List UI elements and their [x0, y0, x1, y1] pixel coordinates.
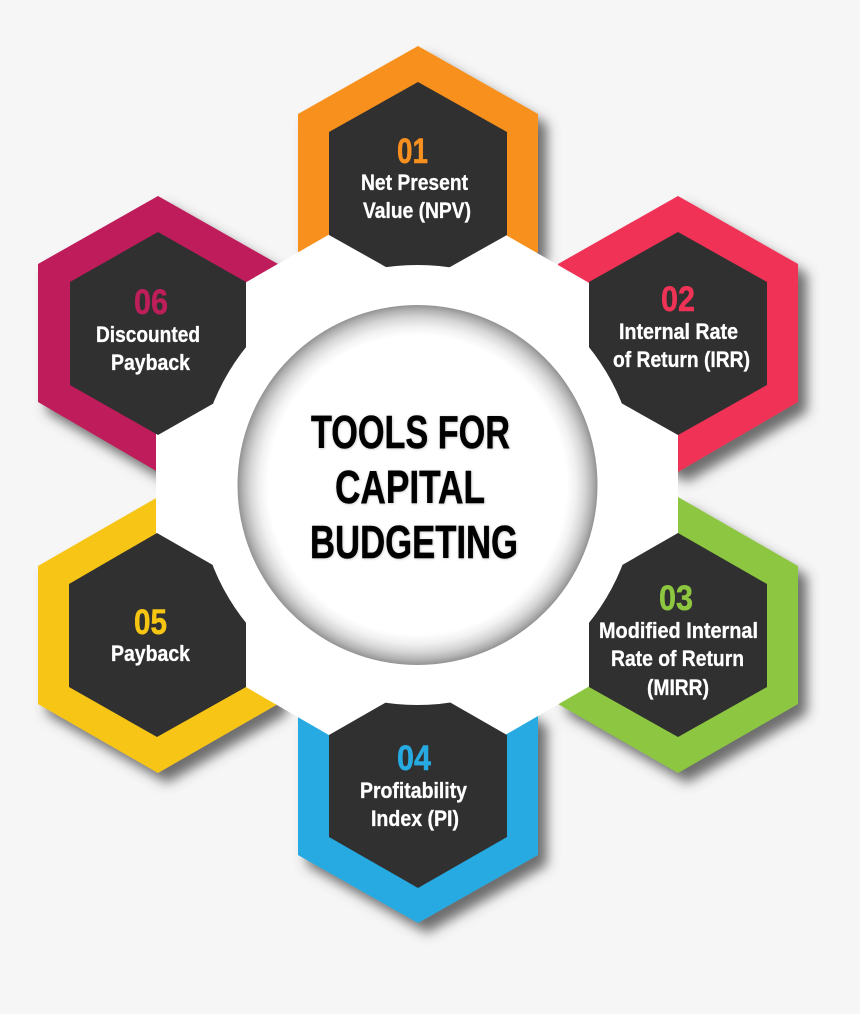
label 02: Internal Rate of Return (IRR): [613, 280, 750, 372]
hexagon ring 04 blue: [298, 647, 538, 923]
label 06: Discounted Payback: [96, 283, 200, 375]
title: BUDGETING: [310, 516, 518, 568]
dark face 06: [70, 232, 246, 435]
label 03: Modified Internal Rate of Return (MIRR): [599, 579, 758, 700]
label 04: Profitability Index (PI): 04: [397, 739, 431, 778]
white gear hexagon: [156, 184, 678, 786]
hexagon ring 02 pink: [558, 196, 798, 472]
hexagon ring 01 orange: [298, 46, 538, 322]
label 01: Net Present Value (NPV): 01: [397, 132, 428, 171]
dark face 02: [589, 232, 767, 435]
label 06: Discounted Payback: Payback: [111, 350, 191, 375]
dark face 05: [69, 533, 246, 737]
hexagon ring 05 yellow: [38, 497, 278, 773]
panel: dark hexagon faces: [69, 82, 767, 888]
label 01: Net Present Value (NPV): Net Present: [361, 170, 469, 195]
label 06: Discounted Payback: 06: [134, 283, 168, 322]
white gear hub: [198, 265, 638, 705]
title: CAPITAL: [335, 461, 485, 513]
label 05: Payback: Payback: [111, 641, 191, 666]
centre dish with inner shadow: [238, 305, 598, 665]
label 02: Internal Rate of Return (IRR): Internal Rate: [619, 319, 738, 344]
label 03: Modified Internal Rate of Return (MIRR): (MIRR): [647, 675, 709, 700]
hexagon ring 03 green: [558, 497, 798, 773]
dark face 04: [329, 684, 507, 888]
label 03: Modified Internal Rate of Return (MIRR): Rate of Return: [611, 646, 744, 671]
label 03: Modified Internal Rate of Return (MIRR): 03: [659, 579, 693, 618]
label 03: Modified Internal Rate of Return (MIRR): Modified Internal: [599, 618, 758, 643]
label 05: Payback: [111, 603, 191, 666]
label 04: Profitability Index (PI): [360, 739, 468, 831]
label 01: Net Present Value (NPV): [361, 132, 471, 223]
label 06: Discounted Payback: Discounted: [96, 322, 200, 347]
title: TOOLS FOR: [311, 406, 510, 458]
title: [310, 406, 518, 568]
label 02: Internal Rate of Return (IRR): of Return (IRR): [613, 347, 750, 372]
label 04: Profitability Index (PI): Index (PI): [371, 806, 459, 831]
label 05: Payback: 05: [134, 603, 167, 642]
hexagon ring 06 magenta: [38, 196, 278, 472]
label 01: Net Present Value (NPV): Value (NPV): [363, 198, 471, 223]
label 04: Profitability Index (PI): Profitability: [360, 778, 468, 803]
label 02: Internal Rate of Return (IRR): 02: [661, 280, 695, 319]
dark face 01: [329, 82, 507, 285]
panel: coloured hexagon rings: [38, 46, 798, 923]
dark face 03: [589, 533, 767, 737]
